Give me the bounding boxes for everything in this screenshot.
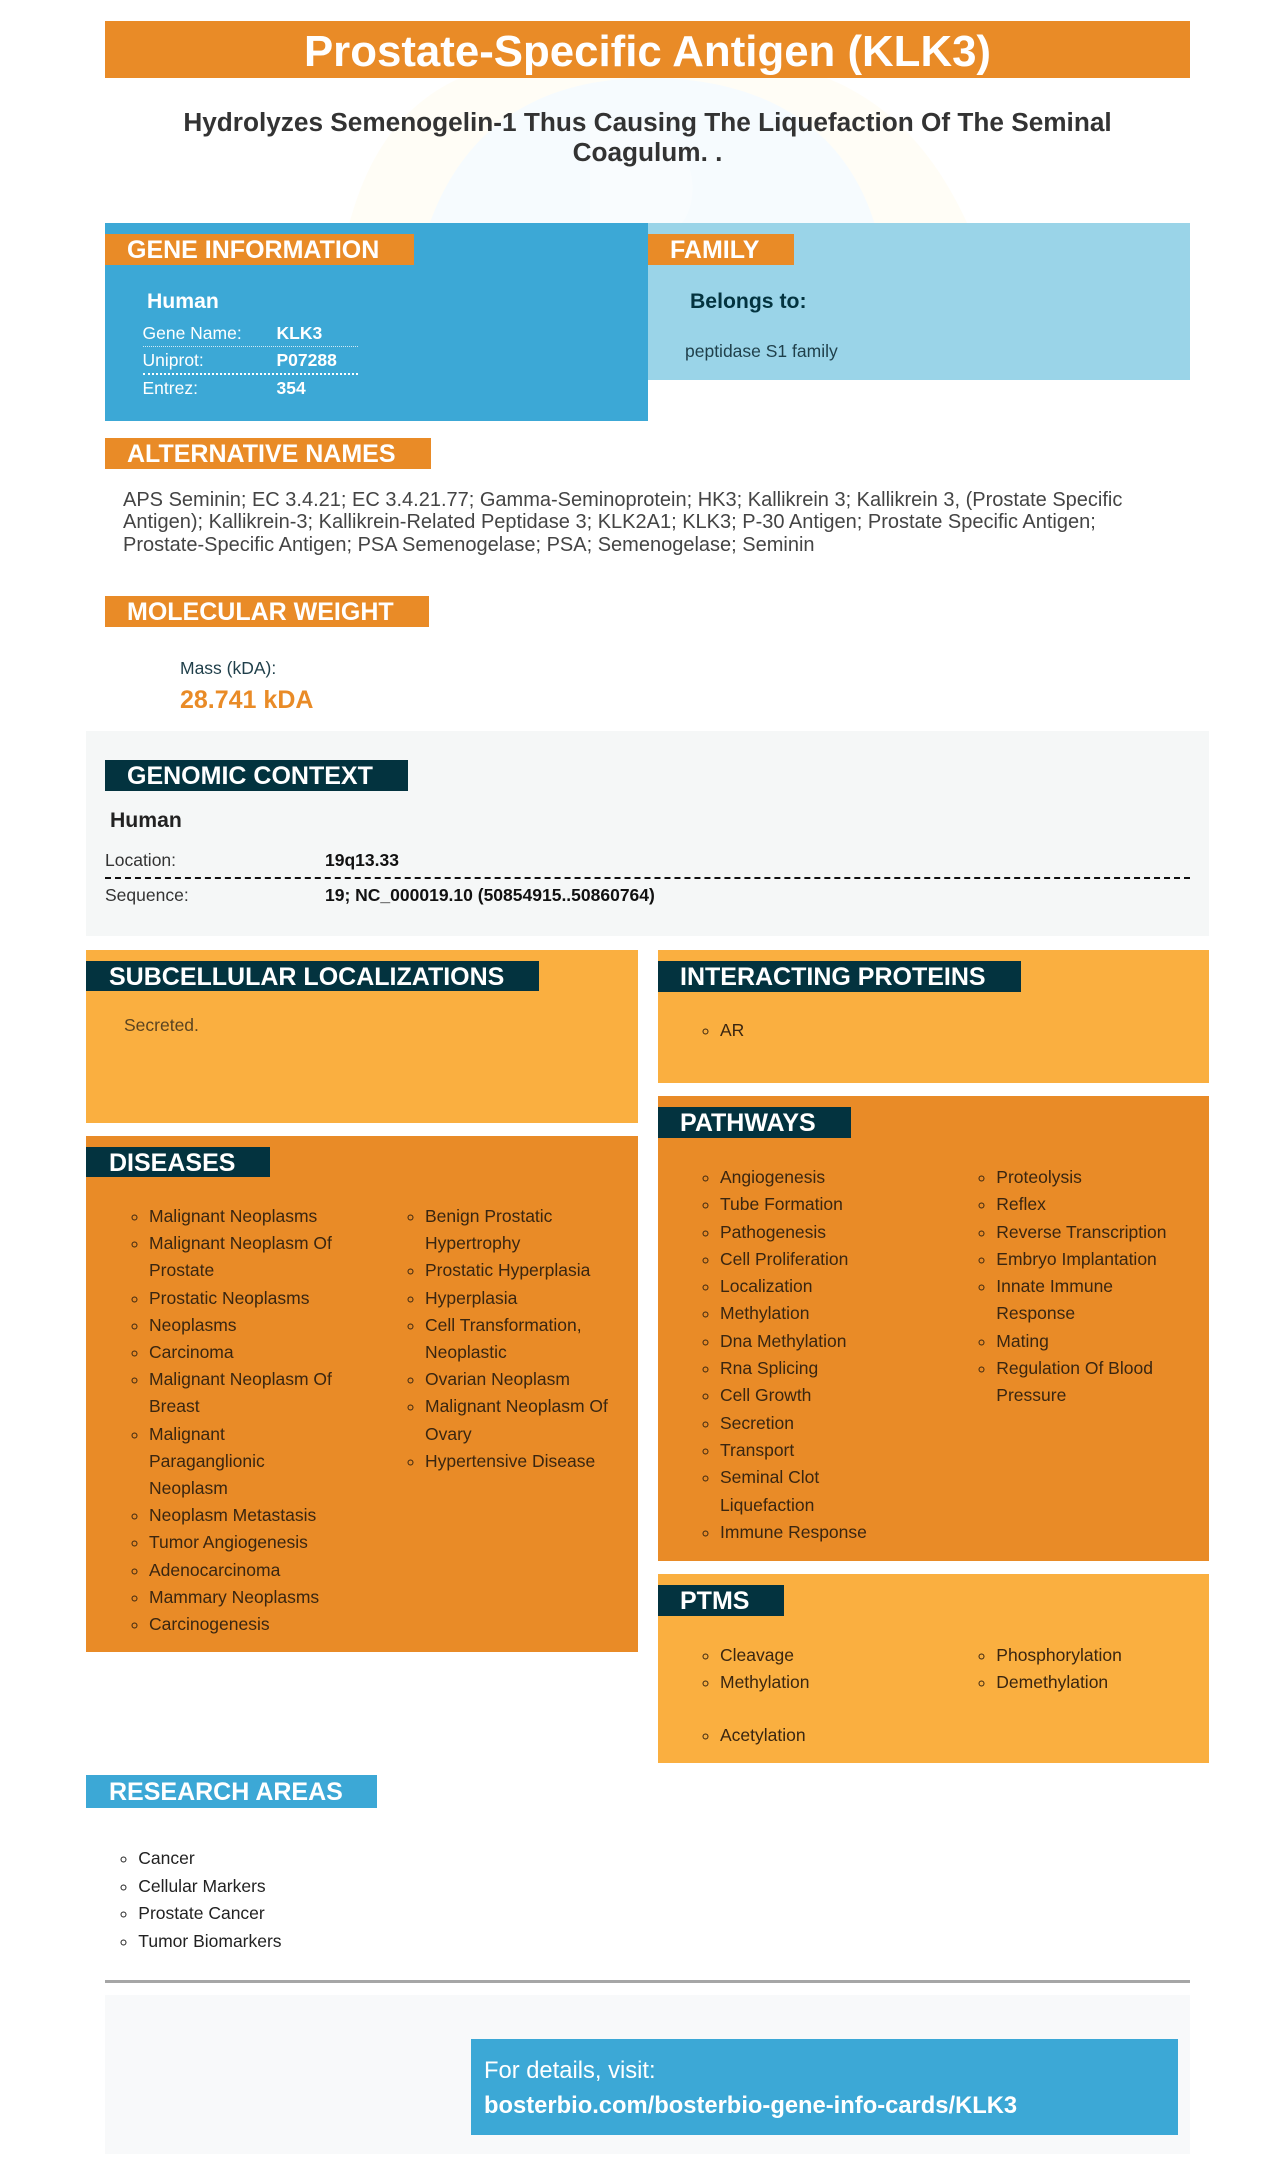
ptms list column 2: Phosphorylation: [996, 1644, 1122, 1664]
panel: pathways: [658, 1096, 1209, 1561]
diseases list column 1: Malignant Neoplasm Of: [149, 1233, 332, 1253]
location row: Location:: [105, 850, 176, 870]
panel: family: [648, 223, 1190, 380]
diseases list column 2: Cell Transformation,: [425, 1315, 582, 1335]
gene details table: Entrez:: [142, 378, 198, 398]
heading: interacting proteins: INTERACTING PROTEINS: [680, 963, 986, 991]
gene details table: KLK3: [276, 323, 322, 343]
sequence row: Sequence:: [105, 885, 189, 905]
panel: footer: [105, 1995, 1190, 2154]
diseases list column 1: Malignant: [149, 1424, 225, 1444]
diseases list column 1: Paraganglionic: [149, 1451, 265, 1471]
pathways list column 1: Tube Formation: [720, 1194, 843, 1214]
heading: gene information: GENE INFORMATION: [127, 236, 379, 264]
title banner: Prostate-Specific Antigen (KLK3): [304, 27, 991, 76]
ptms list column 1: Acetylation: [720, 1725, 806, 1745]
ptms list column 2: Demethylation: [996, 1672, 1108, 1692]
pathways list column 1: Localization: [720, 1276, 812, 1296]
pathways list column 1: Methylation: [720, 1303, 810, 1323]
callout text: For details, visit:: [484, 2056, 656, 2084]
diseases list column 1: Malignant Neoplasm Of: [149, 1369, 332, 1389]
heading: genomic context: GENOMIC CONTEXT: [127, 762, 373, 790]
diseases list column 1: Carcinoma: [149, 1342, 234, 1362]
diseases list column 2: Hypertrophy: [425, 1233, 520, 1253]
species label: Human: [147, 290, 219, 313]
species label: Human: [110, 809, 182, 832]
pathways list column 2: Innate Immune: [996, 1276, 1113, 1296]
pathways list column 1: Rna Splicing: [720, 1358, 818, 1378]
diseases list column 1: Adenocarcinoma: [149, 1560, 280, 1580]
panel: subcellular localizations: [86, 950, 638, 1123]
title banner: [105, 21, 1190, 78]
diseases list column 1: Malignant Neoplasms: [149, 1206, 317, 1226]
ptms list column 2: [978, 1644, 1122, 1692]
heading: pathways: PATHWAYS: [680, 1109, 816, 1137]
pathways list column 1: Angiogenesis: [720, 1167, 825, 1187]
pathways list column 1: Liquefaction: [720, 1495, 814, 1515]
pathways list column 1: Secretion: [720, 1413, 794, 1433]
research areas list: Prostate Cancer: [138, 1903, 265, 1923]
heading: ptms: [658, 1585, 784, 1616]
panel: diseases: [86, 1136, 638, 1652]
ptms list column 1: Cleavage: [720, 1644, 794, 1664]
gene details table: Gene Name:: [142, 323, 242, 343]
research areas list: Cellular Markers: [138, 1876, 266, 1896]
alternative names text: Antigen); Kallikrein-3; Kallikrein-Related Peptidase 3; KLK2A1; KLK3; P-30 Antigen; Prostate Specific Antigen;: [123, 511, 1096, 533]
mass value: 28.741 kDA: [180, 686, 313, 714]
gene details table: 354: [276, 378, 306, 398]
pathways list column 1: Immune Response: [720, 1522, 867, 1542]
diseases list column 2: Benign Prostatic: [425, 1206, 552, 1226]
belongs to label: Belongs to:: [690, 290, 807, 313]
research areas list: Tumor Biomarkers: [138, 1931, 282, 1951]
alternative names text: Prostate-Specific Antigen; PSA Semenogelase; PSA; Semenogelase; Seminin: [123, 534, 815, 556]
heading: ptms: PTMS: [680, 1587, 749, 1615]
panel: gene information: [105, 223, 648, 421]
diseases list column 1: Neoplasm: [149, 1478, 228, 1498]
ptms list column 1: Methylation: [720, 1672, 810, 1692]
alternative names text: APS Seminin; EC 3.4.21; EC 3.4.21.77; Gamma-Seminoprotein; HK3; Kallikrein 3; Kallikrein 3, (Prostate Specific: [123, 489, 1122, 511]
ptms list column 1: [702, 1644, 810, 1745]
diseases list column 1: Neoplasm Metastasis: [149, 1505, 316, 1525]
heading: family: FAMILY: [670, 236, 759, 264]
diseases list column 2: [408, 1206, 608, 1471]
research areas list: [120, 1848, 282, 1951]
heading: research areas: [86, 1775, 377, 1808]
diseases list column 1: Breast: [149, 1396, 200, 1416]
pathways list column 1: Cell Growth: [720, 1385, 811, 1405]
interacting proteins list: AR: [720, 1020, 744, 1040]
pathways list column 1: Transport: [720, 1440, 794, 1460]
sequence row: 19; NC_000019.10 (50854915..50860764): [325, 885, 655, 905]
gene details table: Uniprot:: [142, 350, 204, 370]
callout: details link: [471, 2039, 1178, 2135]
sequence row: [105, 885, 655, 905]
pathways list column 2: Reflex: [996, 1194, 1046, 1214]
pathways list column 2: [978, 1167, 1167, 1405]
diseases list column 2: Prostatic Hyperplasia: [425, 1260, 590, 1280]
location row: [105, 850, 399, 870]
pathways list column 1: Cell Proliferation: [720, 1249, 848, 1269]
pathways list column 2: Pressure: [996, 1385, 1066, 1405]
pathways list column 2: Regulation Of Blood: [996, 1358, 1153, 1378]
research areas list: Cancer: [138, 1848, 195, 1868]
diseases list column 1: Carcinogenesis: [149, 1614, 270, 1634]
diseases list column 1: Tumor Angiogenesis: [149, 1532, 308, 1552]
panel: ptms: [658, 1574, 1209, 1763]
divider rule: [105, 1980, 1190, 1983]
background watermark: [350, 78, 966, 223]
pathways list column 2: Embryo Implantation: [996, 1249, 1157, 1269]
heading: alternative names: ALTERNATIVE NAMES: [127, 440, 396, 468]
heading: diseases: [86, 1147, 270, 1177]
subtitle: [183, 107, 1112, 166]
diseases list column 1: [132, 1206, 332, 1634]
pathways list column 1: [702, 1167, 867, 1542]
callout text: [484, 2056, 1017, 2118]
pathways list column 2: Reverse Transcription: [996, 1222, 1167, 1242]
alternative names text: [123, 489, 1122, 556]
panel: genomic context: [86, 731, 1209, 936]
gene details table: [142, 323, 358, 398]
pathways list column 2: Proteolysis: [996, 1167, 1082, 1187]
location row: 19q13.33: [325, 850, 399, 870]
diseases list column 2: Hypertensive Disease: [425, 1451, 595, 1471]
localization text: Secreted.: [124, 1015, 199, 1035]
diseases list column 2: Malignant Neoplasm Of: [425, 1396, 608, 1416]
callout text: bosterbio.com/bosterbio-gene-info-cards/KLK3: [484, 2092, 1017, 2118]
family value: peptidase S1 family: [685, 341, 838, 361]
diseases list column 2: Hyperplasia: [425, 1288, 517, 1308]
heading: family: [648, 234, 794, 265]
diseases list column 2: Ovarian Neoplasm: [425, 1369, 570, 1389]
pathways list column 1: Seminal Clot: [720, 1467, 819, 1487]
diseases list column 2: Neoplastic: [425, 1342, 507, 1362]
subtitle: Hydrolyzes Semenogelin-1 Thus Causing The Liquefaction Of The Seminal: [183, 107, 1112, 137]
diseases list column 1: Mammary Neoplasms: [149, 1587, 319, 1607]
diseases list column 1: Neoplasms: [149, 1315, 237, 1335]
pathways list column 2: Response: [996, 1303, 1075, 1323]
heading: research areas: RESEARCH AREAS: [109, 1778, 343, 1806]
subtitle: Coagulum. .: [573, 136, 722, 166]
heading: molecular weight: MOLECULAR WEIGHT: [127, 598, 394, 626]
pathways list column 2: Mating: [996, 1331, 1049, 1351]
heading: diseases: DISEASES: [109, 1149, 235, 1177]
heading: subcellular localizations: SUBCELLULAR LOCALIZATIONS: [109, 963, 504, 991]
heading: pathways: [658, 1107, 851, 1138]
diseases list column 1: Prostatic Neoplasms: [149, 1288, 309, 1308]
diseases list column 2: Ovary: [425, 1424, 472, 1444]
pathways list column 1: Pathogenesis: [720, 1222, 826, 1242]
diseases list column 1: Prostate: [149, 1260, 214, 1280]
mass label: Mass (kDA):: [180, 658, 276, 678]
panel: interacting proteins: [658, 950, 1209, 1083]
pathways list column 1: Dna Methylation: [720, 1331, 846, 1351]
gene details table: P07288: [276, 350, 337, 370]
